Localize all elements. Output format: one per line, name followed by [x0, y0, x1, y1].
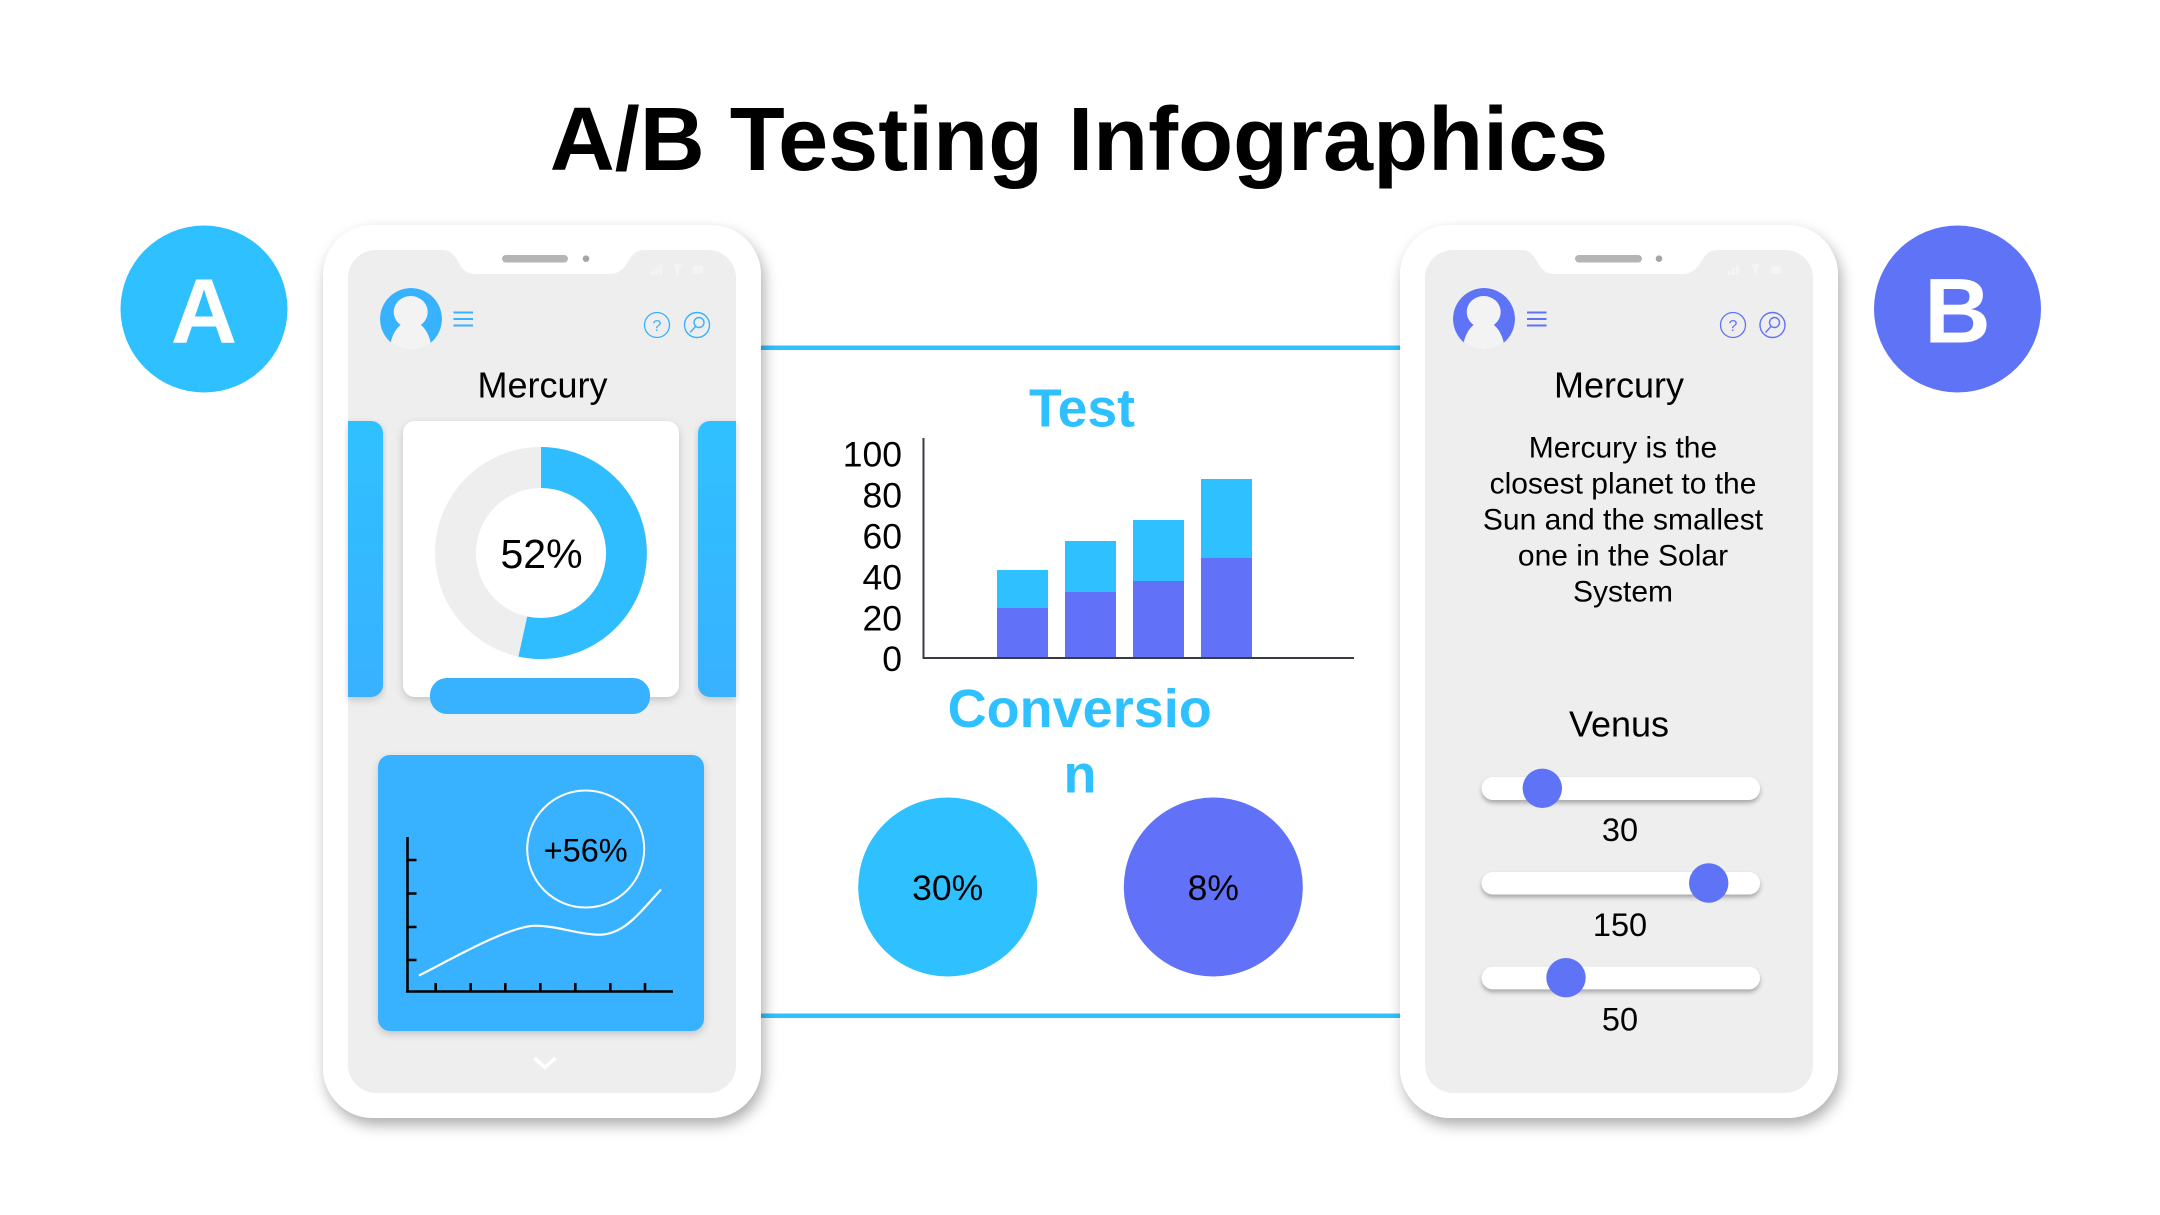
test heading: Test: [1029, 380, 1135, 439]
badge A: A: [171, 260, 237, 362]
phone B avatar: [1453, 288, 1515, 350]
bottom connector line: [755, 1014, 1405, 1018]
badge A: [120, 226, 288, 392]
y-axis labels: 0: [882, 639, 902, 679]
phone A help icon: ?: [653, 318, 662, 335]
y-axis labels: 40: [862, 558, 902, 598]
phone B search icon: [1760, 312, 1785, 338]
phone A speaker and camera: [502, 255, 589, 262]
top connector line: [755, 346, 1405, 350]
y-axis labels: 80: [862, 476, 902, 516]
phone A screen: [348, 250, 736, 1093]
slider 30: [1482, 769, 1760, 848]
donut chart 52%: [435, 447, 647, 659]
y-axis labels: [843, 434, 902, 679]
title: A/B Testing Infographics: [550, 90, 1608, 190]
phone B sliders heading: Venus: [1569, 704, 1669, 745]
phone B status icons: [1728, 264, 1781, 275]
slider 150: [1482, 863, 1760, 943]
phone A body: [323, 225, 761, 1118]
conversion B 8%: [1124, 798, 1303, 976]
conversion A 30%: [858, 798, 1037, 976]
donut chart 52%: 52%: [500, 531, 583, 577]
phone B description: System: [1573, 576, 1673, 608]
growth line: [419, 890, 661, 976]
phone B heading: Mercury: [1554, 364, 1684, 406]
phone B description: one in the Solar: [1518, 539, 1728, 572]
phone B help icon: [1720, 312, 1746, 338]
callout +56%: [527, 790, 644, 908]
y-axis labels: 60: [862, 516, 902, 556]
scroll chevron: [534, 1058, 556, 1068]
badge B: B: [1924, 260, 1991, 362]
slider 50: [1482, 958, 1760, 1038]
phone B: [1400, 225, 1838, 1118]
callout +56%: +56%: [544, 832, 628, 868]
phone B description: Mercury is the: [1529, 431, 1717, 464]
right carousel bar: [698, 421, 736, 697]
badge B: [1874, 226, 2041, 392]
axes: [922, 438, 1354, 659]
conversion heading: n: [1064, 744, 1096, 804]
phone A avatar: [380, 288, 442, 350]
donut card: [403, 421, 679, 697]
bars: [997, 479, 1252, 658]
line chart panel: [378, 755, 704, 1031]
phone B help icon: ?: [1729, 318, 1738, 335]
phone A status icons: [651, 264, 703, 275]
slider 150: 150: [1593, 907, 1647, 943]
phone A help icon: [644, 312, 670, 338]
phone B speaker and camera: [1575, 255, 1662, 262]
phone A menu icon: [454, 312, 473, 326]
card button: [430, 678, 650, 714]
conversion A 30%: 30%: [912, 868, 983, 908]
slider 50: 50: [1602, 1002, 1638, 1038]
stacked bar chart: [843, 434, 1354, 679]
phone B screen: [1425, 250, 1813, 1093]
phone B menu icon: [1527, 312, 1546, 326]
y-axis labels: 20: [862, 598, 902, 638]
phone A: [323, 225, 761, 1118]
phone A heading: Mercury: [477, 364, 608, 406]
y-axis labels: 100: [843, 434, 902, 474]
phone B description: Sun and the smallest: [1483, 503, 1764, 536]
phone B description: closest planet to the: [1490, 467, 1756, 500]
slider 30: 30: [1602, 812, 1638, 848]
conversion B 8%: 8%: [1188, 868, 1239, 908]
left carousel bar: [348, 421, 383, 697]
phone A search icon: [684, 312, 710, 338]
conversion heading: Conversio: [948, 679, 1212, 739]
axes: [406, 837, 673, 992]
phone B body: [1400, 225, 1838, 1118]
